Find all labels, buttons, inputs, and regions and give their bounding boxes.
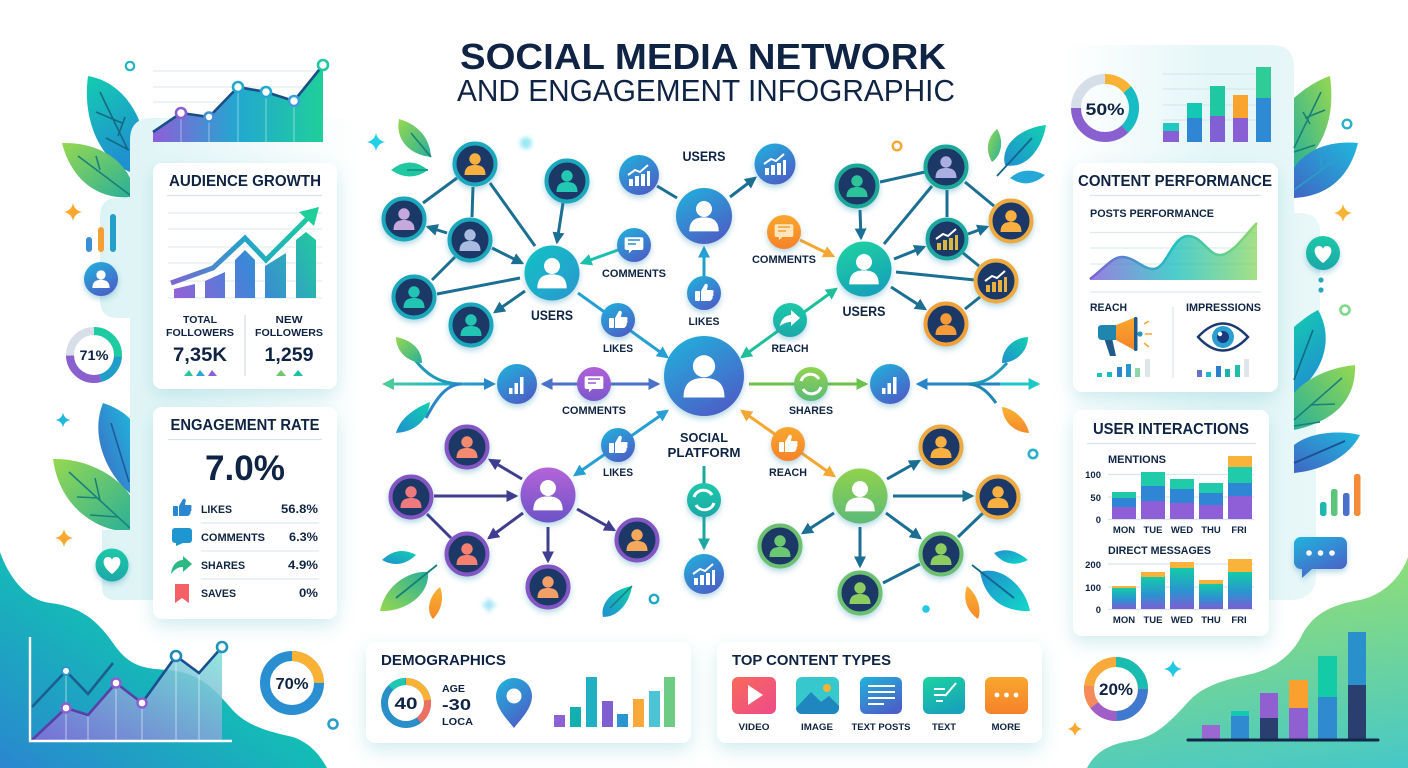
chart: mentions: TUE — [1144, 525, 1162, 536]
line chart: bottom left wave — [30, 637, 232, 741]
hub: users bottom right — [832, 468, 888, 524]
heading: demographics: DEMOGRAPHICS — [381, 652, 506, 669]
chart: mentions: 50 — [1090, 493, 1101, 504]
stat: new followers — [255, 314, 323, 376]
tile: image — [796, 677, 839, 733]
sparkle: orange lower left — [55, 529, 73, 547]
connectors: top-right cluster — [742, 172, 994, 357]
pale backdrop: left column — [100, 118, 360, 600]
label: reach bottom: REACH — [769, 467, 807, 479]
label: comments centre: COMMENTS — [562, 405, 626, 417]
stat: total followers: FOLLOWERS — [166, 327, 234, 339]
donut: 20%: 20% — [1099, 681, 1133, 699]
row: likes: 56.8% — [281, 504, 318, 516]
panel: demographics — [366, 642, 691, 743]
chart: mentions: FRI — [1231, 525, 1247, 536]
stat: new followers: NEW — [276, 314, 303, 326]
hub: users top left — [524, 246, 580, 300]
cluster: top-right user nodes — [836, 146, 1032, 344]
cluster: bottom-right user nodes — [760, 426, 1018, 614]
heading: top content types: TOP CONTENT TYPES — [732, 652, 891, 669]
panel: audience growth — [153, 163, 337, 389]
donut: age 40: 40 — [394, 695, 418, 713]
row: comments: COMMENTS — [201, 532, 265, 544]
donut: 50%: 50% — [1086, 100, 1124, 119]
cluster: top-left user nodes — [384, 144, 588, 346]
row: comments — [172, 528, 318, 546]
panel: engagement rate — [153, 407, 337, 619]
row: shares: SHARES — [201, 560, 245, 572]
small ring: top left — [126, 62, 134, 70]
sparkle: orange left — [64, 203, 82, 221]
chart: direct messages: TUE — [1144, 615, 1162, 626]
small ring: bottom left — [328, 720, 338, 728]
icon: reach thumb orange — [771, 427, 805, 461]
panel: top content types — [717, 642, 1042, 743]
heading: user interactions: USER INTERACTIONS — [1093, 421, 1249, 438]
chart: mentions: MENTIONS — [1108, 454, 1166, 466]
mini bars: impressions — [1197, 359, 1249, 377]
chart: direct messages — [1085, 545, 1254, 626]
chart: direct messages: 100 — [1085, 583, 1101, 594]
label: likes: LIKES — [603, 343, 633, 355]
icon: growth left — [619, 155, 659, 195]
stat: total followers: 7,35K — [173, 345, 227, 366]
label: social platform: SOCIAL — [680, 431, 728, 445]
icon: growth right — [754, 144, 796, 184]
chart: mentions — [1085, 454, 1254, 536]
donut: age 40 — [384, 682, 428, 724]
arrow: growth trend — [171, 207, 319, 283]
heading: audience growth: AUDIENCE GROWTH — [169, 173, 321, 190]
hub: users top right — [836, 242, 892, 296]
area chart: top left — [153, 60, 328, 142]
heading: content performance: CONTENT PERFORMANCE — [1078, 173, 1272, 190]
icon: comments purple — [577, 367, 611, 401]
text: age and location: -30 — [442, 697, 471, 714]
hub: users bottom left — [520, 468, 576, 522]
connectors: bottom-right cluster — [704, 411, 983, 583]
label: likes centre: LIKES — [688, 316, 720, 328]
row: saves — [175, 584, 318, 603]
icon: heart badge right — [1306, 236, 1340, 270]
bar chart: demographics — [554, 677, 675, 727]
icon: megaphone — [1098, 317, 1152, 356]
row: saves: SAVES — [201, 588, 236, 600]
hub: social platform — [664, 336, 744, 416]
panel: content performance — [1073, 163, 1278, 392]
chart: direct messages: THU — [1201, 615, 1221, 626]
tile: text posts — [852, 677, 910, 733]
stacked bars: bottom right wave — [1188, 632, 1378, 740]
sparkles: lower right — [1068, 660, 1182, 736]
text: age and location: AGE — [442, 683, 465, 695]
icon: bars right — [870, 364, 910, 404]
icon: likes centre — [687, 276, 721, 310]
row: comments: 6.3% — [289, 532, 318, 544]
decorative leaf group: far left — [53, 76, 139, 532]
row: shares — [171, 556, 318, 574]
icon: likes left — [601, 303, 635, 337]
icon: growth bottom — [684, 554, 724, 594]
label: reach: REACH — [1090, 302, 1127, 314]
icon: eye — [1198, 324, 1248, 350]
icon: likes bottom — [601, 428, 635, 462]
chart: mentions: THU — [1201, 525, 1221, 536]
tile: text: TEXT — [932, 722, 956, 733]
icon: shares cycle — [794, 367, 828, 401]
chart: direct messages: WED — [1171, 615, 1193, 626]
label: shares: SHARES — [789, 405, 833, 417]
network deco: leaves and sparkles — [367, 119, 1046, 619]
tile: video — [732, 677, 776, 733]
connectors: centre row with branches — [382, 353, 1038, 418]
donut: 70%: 70% — [276, 676, 308, 693]
stat: total followers: TOTAL — [183, 314, 218, 326]
title — [457, 36, 955, 108]
icon: reach arrow — [773, 303, 807, 337]
label: users: USERS — [531, 308, 573, 323]
icon: heart badge left — [96, 548, 128, 582]
label: comments right: COMMENTS — [752, 254, 816, 266]
area chart: posts performance — [1090, 223, 1257, 280]
chart: direct messages: 200 — [1085, 560, 1101, 571]
heading: engagement rate: ENGAGEMENT RATE — [170, 417, 320, 434]
tile: more: MORE — [992, 722, 1020, 733]
chart: mentions: 0 — [1096, 515, 1101, 526]
chart: direct messages: FRI — [1231, 615, 1247, 626]
tile: text — [923, 677, 965, 733]
icon: user badge left — [84, 262, 118, 296]
stat: new followers: FOLLOWERS — [255, 327, 323, 339]
decorative leaf group: far right — [1294, 76, 1360, 473]
hub: users top centre — [676, 188, 732, 244]
chart: direct messages: MON — [1113, 615, 1135, 626]
stat: new followers: 1,259 — [264, 345, 314, 366]
sparkle: cyan left — [56, 413, 70, 427]
icon: chat bubble — [1294, 537, 1347, 578]
chart: mentions: 100 — [1085, 470, 1101, 481]
label: likes bottom: LIKES — [603, 467, 633, 479]
chart: mentions: WED — [1171, 525, 1193, 536]
text: age and location — [442, 683, 473, 728]
branch leaves: centre row — [396, 337, 1029, 433]
icon: comments orange — [767, 215, 801, 249]
row: likes: LIKES — [201, 504, 232, 516]
tile: video: VIDEO — [738, 722, 770, 733]
mini bars icon: right — [1320, 474, 1360, 516]
cluster: bottom-left user nodes — [390, 426, 658, 608]
label: impressions: IMPRESSIONS — [1186, 302, 1261, 314]
background wave: bottom right — [1087, 557, 1408, 768]
tile: text posts: TEXT POSTS — [852, 722, 910, 733]
panel: user interactions — [1073, 410, 1269, 636]
decorations: right side icons — [1318, 120, 1352, 314]
connectors: top-left cluster — [423, 178, 755, 357]
row: shares: 4.9% — [288, 560, 318, 572]
icon: cycle centre — [687, 483, 721, 517]
row: likes — [173, 499, 318, 516]
row: saves: 0% — [299, 588, 318, 600]
title: AND ENGAGEMENT INFOGRAPHIC — [457, 73, 955, 108]
icon: location pin — [496, 678, 532, 728]
icon: comments bubble blue — [617, 228, 651, 262]
label: social platform: PLATFORM — [668, 446, 740, 460]
connectors: bottom-left cluster — [427, 411, 667, 561]
label: reach top: REACH — [772, 343, 809, 355]
tile: image: IMAGE — [801, 722, 833, 733]
donut: 71%: 71% — [80, 347, 109, 363]
mini bars: reach — [1097, 359, 1150, 377]
label: social platform — [668, 431, 740, 460]
stat: total followers — [166, 314, 234, 376]
stacked bars: top right — [1163, 67, 1271, 142]
title: SOCIAL MEDIA NETWORK — [460, 36, 946, 77]
donut: 71% — [70, 331, 118, 379]
background wave: bottom left — [0, 552, 327, 768]
chart: direct messages: 0 — [1096, 605, 1101, 616]
tile: more — [985, 677, 1028, 733]
text: age and location: LOCA — [442, 716, 473, 728]
mini bars icon: left — [86, 214, 116, 252]
label: users top: USERS — [682, 149, 726, 164]
donut: 70% — [265, 656, 319, 710]
chart: mentions: MON — [1113, 525, 1135, 536]
donut: 50% — [1076, 79, 1134, 137]
chart: direct messages: DIRECT MESSAGES — [1108, 545, 1211, 557]
bar chart: follower growth — [174, 232, 316, 298]
icon: bars left — [497, 364, 537, 404]
label: comments: COMMENTS — [602, 268, 666, 280]
label: posts performance: POSTS PERFORMANCE — [1090, 208, 1214, 220]
metric: 7.0%: 7.0% — [205, 449, 285, 488]
pale backdrop: right column — [1060, 45, 1320, 600]
donut: 20% — [1089, 662, 1143, 716]
label: users right: USERS — [842, 304, 886, 319]
